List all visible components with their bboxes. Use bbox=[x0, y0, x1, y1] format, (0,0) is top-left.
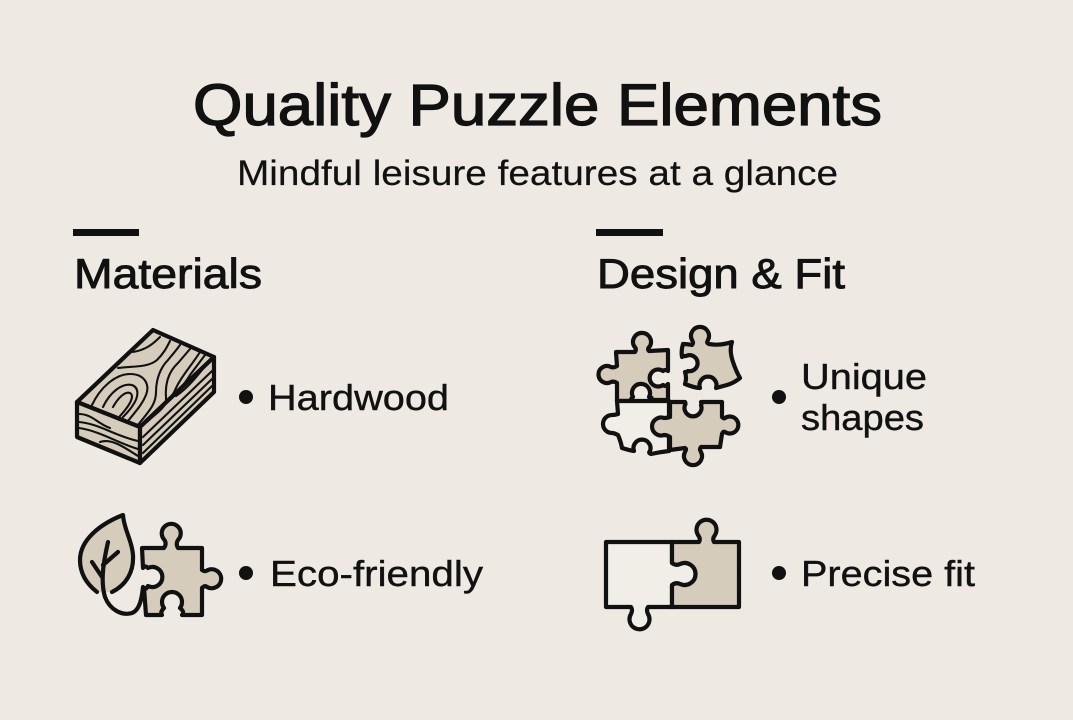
bullet: eco-friendly bbox=[239, 566, 253, 580]
bullet: unique shapes bbox=[772, 390, 786, 404]
subtitle: Mindful leisure features at a glance bbox=[237, 154, 838, 193]
bullet: precise fit bbox=[772, 566, 786, 580]
panel: design and fit bbox=[596, 229, 975, 629]
label: unique shapes: shapes bbox=[801, 397, 924, 438]
panel: materials bbox=[73, 229, 483, 615]
heading accent bar: design and fit bbox=[596, 229, 663, 236]
icon: wood block bbox=[77, 330, 214, 463]
title: Quality Puzzle Elements bbox=[193, 73, 882, 138]
label: unique shapes: Unique bbox=[801, 356, 927, 397]
label: eco-friendly: Eco-friendly bbox=[270, 553, 483, 594]
heading: materials: Materials bbox=[74, 250, 262, 297]
label: hardwood: Hardwood bbox=[268, 377, 449, 418]
icon: two joined puzzle pieces bbox=[606, 520, 739, 629]
heading accent bar: materials bbox=[73, 229, 139, 236]
icon: leaf and puzzle piece bbox=[80, 515, 221, 615]
bullet: hardwood bbox=[239, 390, 253, 404]
label: precise fit: Precise fit bbox=[801, 553, 975, 594]
heading: design and fit: Design & Fit bbox=[597, 250, 845, 297]
icon: four interlocking puzzle pieces bbox=[598, 327, 740, 465]
